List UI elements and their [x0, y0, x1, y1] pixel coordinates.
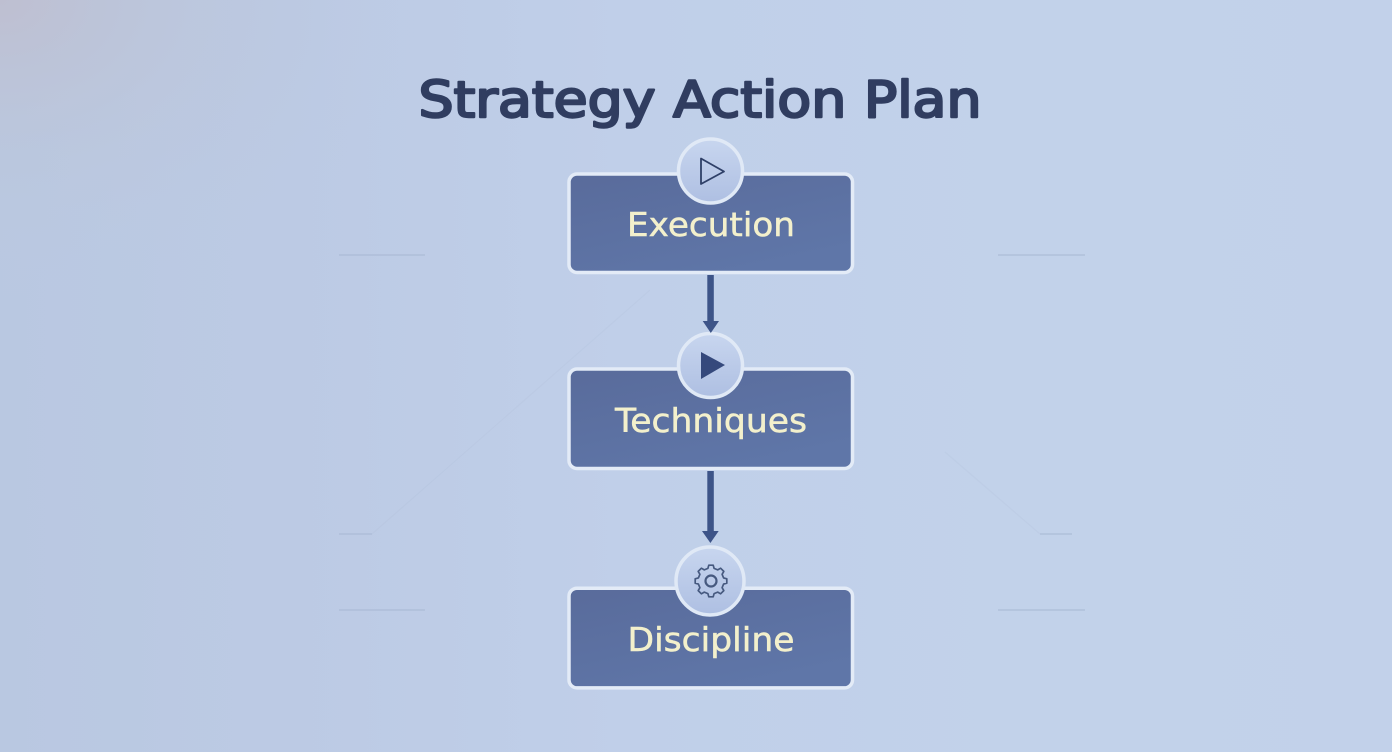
icon: gear [676, 547, 744, 615]
Techniques label: Techniques [614, 401, 807, 440]
Discipline label: Discipline [628, 620, 794, 659]
Discipline box [569, 588, 852, 688]
faint background lines [339, 255, 1085, 610]
panel: Execution [569, 139, 852, 272]
arrow: Execution to Techniques [703, 275, 719, 333]
title: Strategy Action Plan [418, 71, 982, 129]
icon: outline play [678, 139, 742, 203]
arrow: Techniques to Discipline [702, 471, 719, 543]
Techniques box [569, 369, 852, 468]
icon: solid play [678, 334, 742, 398]
panel: Techniques [569, 334, 852, 468]
Execution box [569, 174, 852, 272]
Execution label: Execution [627, 205, 795, 244]
panel: Discipline [569, 547, 852, 688]
